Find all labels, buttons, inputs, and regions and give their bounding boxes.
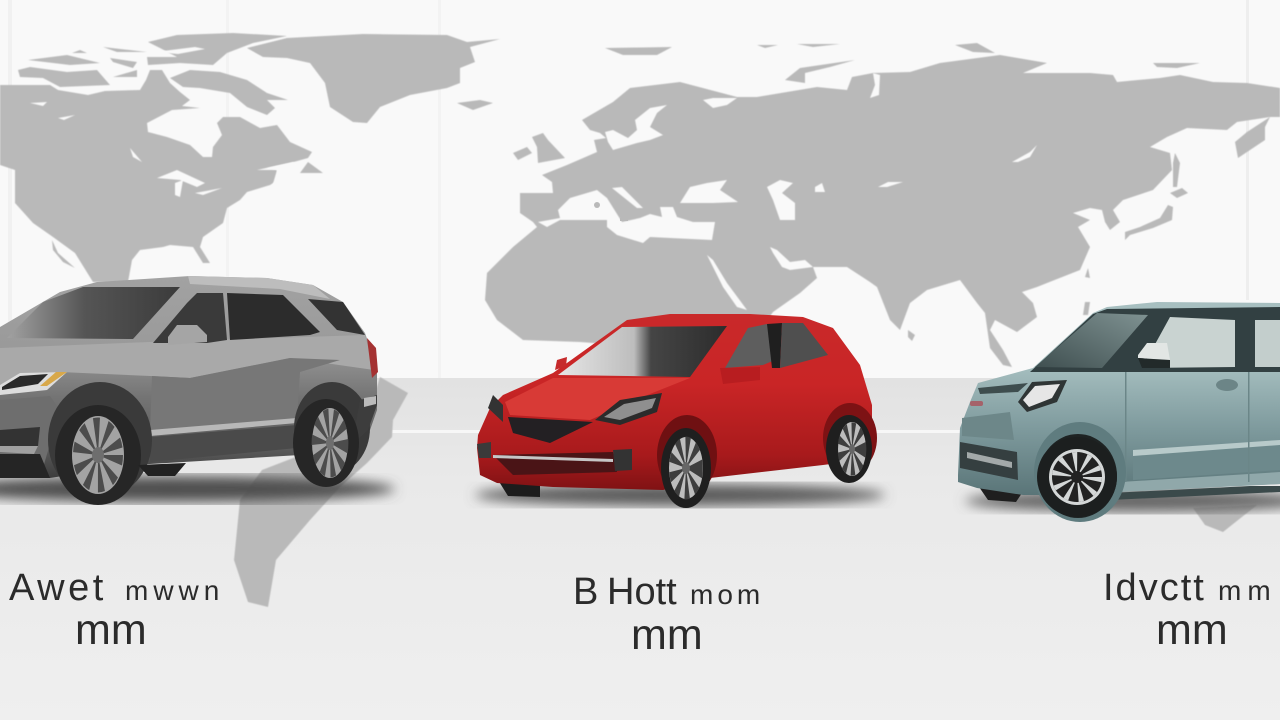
suv mirror (168, 325, 207, 345)
map: uk and ireland (513, 133, 565, 163)
suv hidden rear tyre (138, 463, 186, 476)
red side windows (725, 324, 775, 368)
map: greenland (247, 34, 500, 123)
label: right car name (1103, 567, 1277, 609)
label: center car name: B (573, 571, 598, 613)
background wall (0, 0, 1280, 378)
map: japan and pacific islands (908, 117, 1270, 341)
map: seas and lakes (30, 47, 1037, 310)
teal front wheel (1037, 437, 1117, 517)
label: right car name: mm (1218, 575, 1277, 606)
suv headlight (0, 372, 67, 395)
red hidden left tyre (498, 480, 540, 497)
label: center car name: Hott (607, 571, 677, 613)
teal lower panel (1133, 442, 1280, 480)
teal body (958, 302, 1280, 495)
teal door lines and handle (1125, 372, 1126, 482)
teal side window (1142, 317, 1235, 368)
red headlights (595, 393, 662, 425)
suv front bumper (0, 396, 60, 478)
teal roof frame (1030, 307, 1280, 372)
map: north america (0, 70, 312, 282)
label: center unit: mm (631, 611, 703, 659)
red body (477, 314, 872, 490)
teal grille (962, 412, 1014, 440)
label: left car name: mwwn (125, 575, 224, 606)
red mirrors (720, 367, 760, 384)
shadow under teal car (965, 490, 1280, 512)
suv rear wheel (293, 399, 359, 487)
teal mirror (1138, 343, 1170, 360)
floor (0, 378, 1280, 720)
map: south america (234, 377, 408, 607)
red windscreen (558, 326, 727, 377)
label: left unit: mm (75, 606, 147, 654)
map: newfoundland (300, 162, 323, 173)
suv roof rail (188, 276, 330, 299)
suv upper panel highlight (0, 335, 374, 385)
car: teal kei car (958, 302, 1280, 522)
teal sill (1120, 472, 1280, 492)
map: southern fragment (1193, 505, 1257, 532)
teal badge (970, 401, 983, 406)
label: center car name (573, 571, 764, 613)
map: eurasia and africa (485, 55, 1280, 367)
red wheel arches (657, 415, 717, 495)
teal wheel arch (1034, 422, 1126, 522)
car: grey suv (0, 276, 378, 505)
teal hood line (978, 383, 1028, 394)
red front wheel (661, 428, 711, 508)
red lower grille (493, 452, 617, 475)
suv windscreen (7, 287, 180, 339)
label: right car name: Idvctt (1103, 567, 1206, 609)
suv trim strips (150, 418, 297, 436)
car: red hatchback (477, 314, 877, 508)
label: left car name (9, 567, 224, 609)
suv tail light (367, 338, 378, 378)
map: iceland (457, 100, 493, 110)
shadow under grey suv (0, 476, 395, 502)
teal hidden left tyre (977, 484, 1024, 502)
teal windscreen (1035, 313, 1148, 368)
map: baffin island (170, 70, 288, 115)
map: arctic islands (18, 47, 147, 87)
map: ellesmere island (147, 33, 287, 65)
map: baja california (52, 240, 75, 268)
red grille (508, 417, 593, 443)
teal trim strip (1133, 440, 1280, 456)
red rear wheel (826, 415, 872, 483)
suv front wheel (55, 405, 141, 505)
teal headlight (1018, 380, 1067, 412)
map: arctic fragments (605, 43, 1200, 83)
label: center car name: mom (690, 579, 764, 610)
shadow under red car (475, 484, 885, 506)
suv wheel arches (48, 382, 152, 498)
label: left car name: Awet (9, 567, 107, 609)
suv side windows (153, 293, 227, 343)
world map (0, 33, 1280, 607)
red hood highlight (505, 378, 690, 420)
suv body (0, 276, 377, 478)
label: right unit: mm (1156, 606, 1228, 654)
